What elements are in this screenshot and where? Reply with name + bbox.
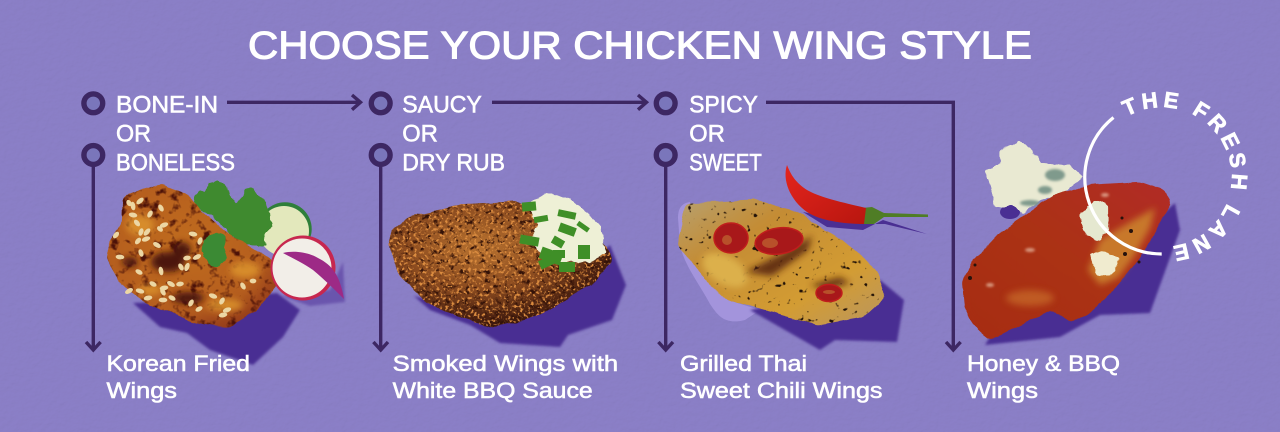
- question 2 text: [402, 92, 505, 177]
- label: honey and BBQ wings: Honey & BBQ: [967, 351, 1120, 376]
- label: Korean fried wings: [106, 351, 250, 403]
- grill marks: [745, 236, 850, 290]
- cucumber slice: [258, 202, 312, 256]
- cheese veins: [1020, 169, 1065, 206]
- question 3 text: SWEET: [689, 150, 762, 177]
- blue cheese crumble: [986, 141, 1083, 214]
- wing body: [105, 183, 282, 328]
- label: smoked wings with white BBQ sauce: White BBQ Sauce: [393, 378, 593, 403]
- badge arc: [1085, 118, 1162, 254]
- shadow: [133, 293, 300, 365]
- food: Korean fried wing: [105, 180, 345, 365]
- white sauce: [526, 193, 606, 262]
- question 1 text: BONELESS: [116, 150, 235, 177]
- node circles: [84, 94, 675, 164]
- question 2 text: SAUCY: [402, 92, 482, 119]
- bright crust highlights: [126, 215, 260, 311]
- chili slice centres: [722, 235, 835, 294]
- food: honey and BBQ wing: [962, 141, 1180, 345]
- label: smoked wings with white BBQ sauce: [393, 351, 618, 403]
- chives: [519, 201, 590, 272]
- radish: [270, 236, 336, 300]
- arrow: saucy to spicy: [492, 95, 646, 110]
- label: honey and BBQ wings: [967, 351, 1120, 403]
- sauce highlights: [986, 193, 1109, 287]
- chili shadow: [803, 212, 927, 234]
- question 2 text: OR: [402, 121, 438, 148]
- sesame seeds: [112, 197, 256, 318]
- label: honey and BBQ wings: Wings: [967, 378, 1038, 403]
- red onion: [283, 252, 344, 299]
- golden wing patch: [1088, 208, 1155, 285]
- wing body: [962, 182, 1172, 340]
- shadow: [985, 203, 1180, 345]
- garnish shadow: [282, 262, 345, 306]
- label: grilled Thai sweet chili wings: Sweet Chili Wings: [680, 378, 882, 403]
- flow arrows and nodes: [86, 95, 961, 350]
- arrow: boneless to Korean fried wings: [86, 167, 101, 350]
- shadow: [414, 245, 626, 347]
- food: grilled Thai sweet chili wing: [678, 165, 928, 350]
- blue cheese crumble lower: [1090, 251, 1120, 276]
- chili slices: [714, 223, 842, 302]
- cilantro leaf on wing: [202, 232, 228, 268]
- arrow: dry rub to smoked wings: [373, 167, 388, 350]
- question 1 text: OR: [116, 121, 151, 148]
- question 3 text: [689, 92, 762, 177]
- question 3 text: OR: [689, 121, 725, 148]
- shadow: [750, 280, 904, 350]
- pepper specks: [968, 216, 1140, 280]
- wing body: [390, 202, 614, 327]
- wing body: [678, 200, 885, 325]
- food: smoked wing with white BBQ sauce: [390, 193, 626, 347]
- glaze pool: [678, 202, 760, 321]
- chili pepper: [786, 165, 866, 224]
- arrow: sweet to grilled Thai wings: [658, 167, 673, 350]
- title: CHOOSE YOUR CHICKEN WING STYLE: [248, 24, 1032, 68]
- question 2 text: DRY RUB: [402, 150, 505, 177]
- label: grilled Thai sweet chili wings: Grilled Thai: [680, 351, 807, 376]
- label: grilled Thai sweet chili wings: [680, 351, 882, 403]
- question 1 text: [116, 92, 235, 177]
- cheese shadow: [1000, 205, 1020, 219]
- label: Korean fried wings: Wings: [106, 378, 177, 403]
- arrow: spicy to honey and BBQ wings: [766, 102, 961, 350]
- golden lower patch: [1006, 290, 1054, 306]
- question 1 text: BONE-IN: [116, 92, 218, 119]
- lower left golden glaze: [696, 245, 754, 295]
- cilantro: [193, 180, 272, 247]
- badge curved text: THE FRESH LANE: [1120, 92, 1248, 262]
- label: smoked wings with white BBQ sauce: Smoked Wings with: [393, 351, 618, 376]
- blue cheese on wing: [1080, 200, 1108, 242]
- arrow: bone-in to saucy: [227, 95, 360, 110]
- badge: the fresh lane: [1083, 92, 1248, 262]
- label: Korean fried wings: Korean Fried: [106, 351, 250, 376]
- question 3 text: SPICY: [689, 92, 758, 119]
- chili stem: [862, 207, 928, 224]
- dark glaze pools: [122, 242, 204, 304]
